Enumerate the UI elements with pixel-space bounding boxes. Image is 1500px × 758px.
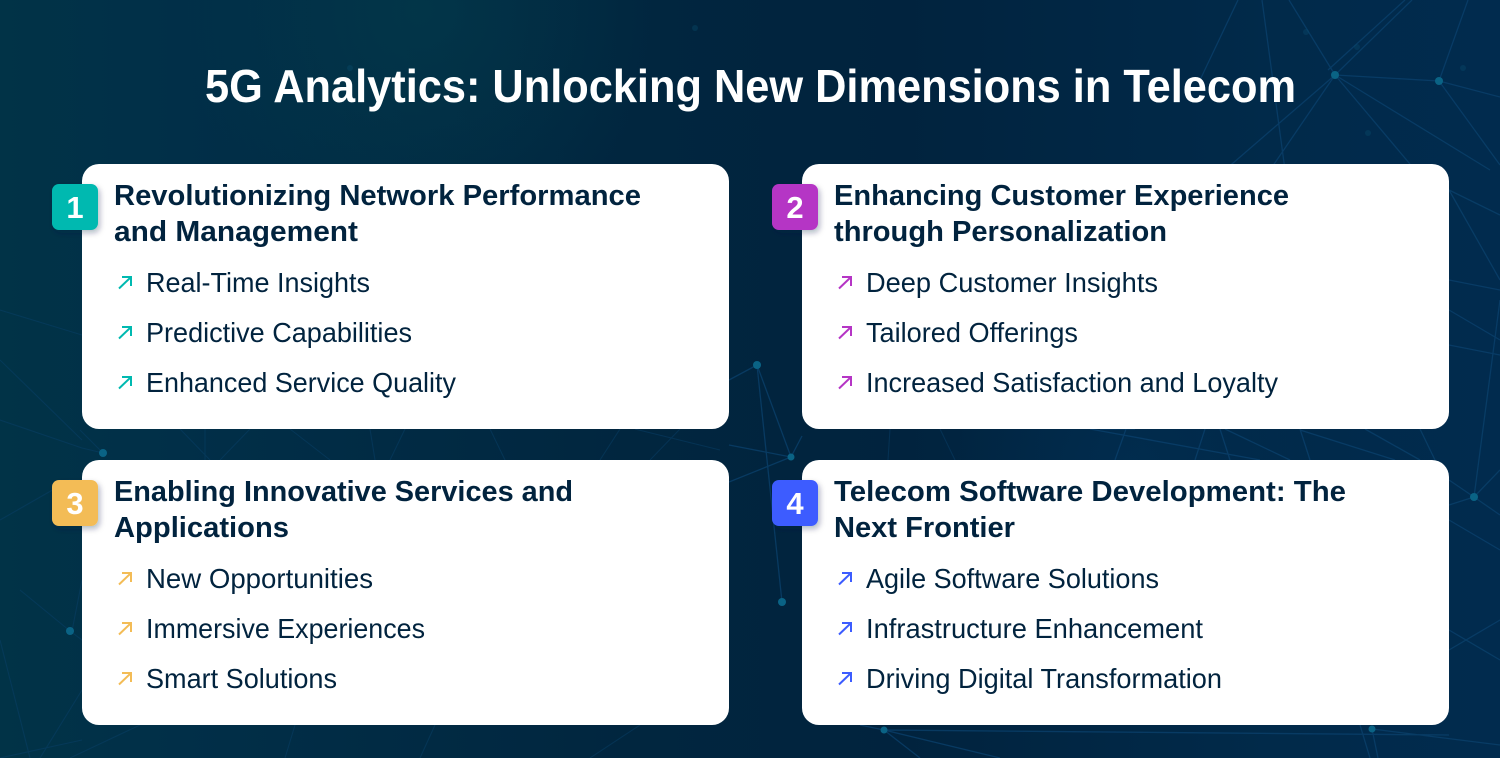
heading 2: Enhancing Customer Experience bbox=[834, 180, 1289, 212]
badge 2: 2 bbox=[786, 190, 804, 225]
heading 2: through Personalization bbox=[834, 216, 1167, 248]
heading 4: Telecom Software Development: The bbox=[834, 476, 1346, 508]
heading 3: Applications bbox=[114, 512, 289, 544]
panel: card 1 network performance bbox=[52, 164, 729, 429]
list 2: Deep Customer Insights bbox=[866, 267, 1158, 298]
list 1 bbox=[119, 267, 456, 398]
title: 5G Analytics: Unlocking New Dimensions in Telecom bbox=[205, 60, 1296, 112]
panel: card 2 customer experience bbox=[772, 164, 1449, 429]
panel: card 3 innovative services bbox=[52, 460, 729, 725]
list 4: Driving Digital Transformation bbox=[866, 663, 1222, 694]
heading 3 bbox=[114, 476, 573, 544]
list 2: Tailored Offerings bbox=[866, 317, 1078, 348]
badge 3 bbox=[52, 480, 98, 526]
badge 1 bbox=[52, 184, 98, 230]
heading 3: Enabling Innovative Services and bbox=[114, 476, 573, 508]
list 4: Agile Software Solutions bbox=[866, 563, 1159, 594]
heading 1: and Management bbox=[114, 216, 358, 248]
list 3: Smart Solutions bbox=[146, 663, 337, 694]
heading 2 bbox=[834, 180, 1289, 248]
badge 4: 4 bbox=[786, 486, 804, 521]
list 4 bbox=[839, 563, 1222, 694]
list 4: Infrastructure Enhancement bbox=[866, 613, 1203, 644]
heading 4: Next Frontier bbox=[834, 512, 1015, 544]
list 3 bbox=[119, 563, 425, 694]
panel: card 4 software development bbox=[772, 460, 1449, 725]
list 1: Real-Time Insights bbox=[146, 267, 370, 298]
badge 2 bbox=[772, 184, 818, 230]
badge 1: 1 bbox=[66, 190, 84, 225]
badge 4 bbox=[772, 480, 818, 526]
list 2 bbox=[839, 267, 1278, 398]
list 2: Increased Satisfaction and Loyalty bbox=[866, 367, 1278, 398]
list 1: Enhanced Service Quality bbox=[146, 367, 456, 398]
list 3: Immersive Experiences bbox=[146, 613, 425, 644]
badge 3: 3 bbox=[66, 486, 84, 521]
list 3: New Opportunities bbox=[146, 563, 373, 594]
heading 1 bbox=[114, 180, 641, 248]
heading 1: Revolutionizing Network Performance bbox=[114, 180, 641, 212]
heading 4 bbox=[834, 476, 1346, 544]
list 1: Predictive Capabilities bbox=[146, 317, 412, 348]
